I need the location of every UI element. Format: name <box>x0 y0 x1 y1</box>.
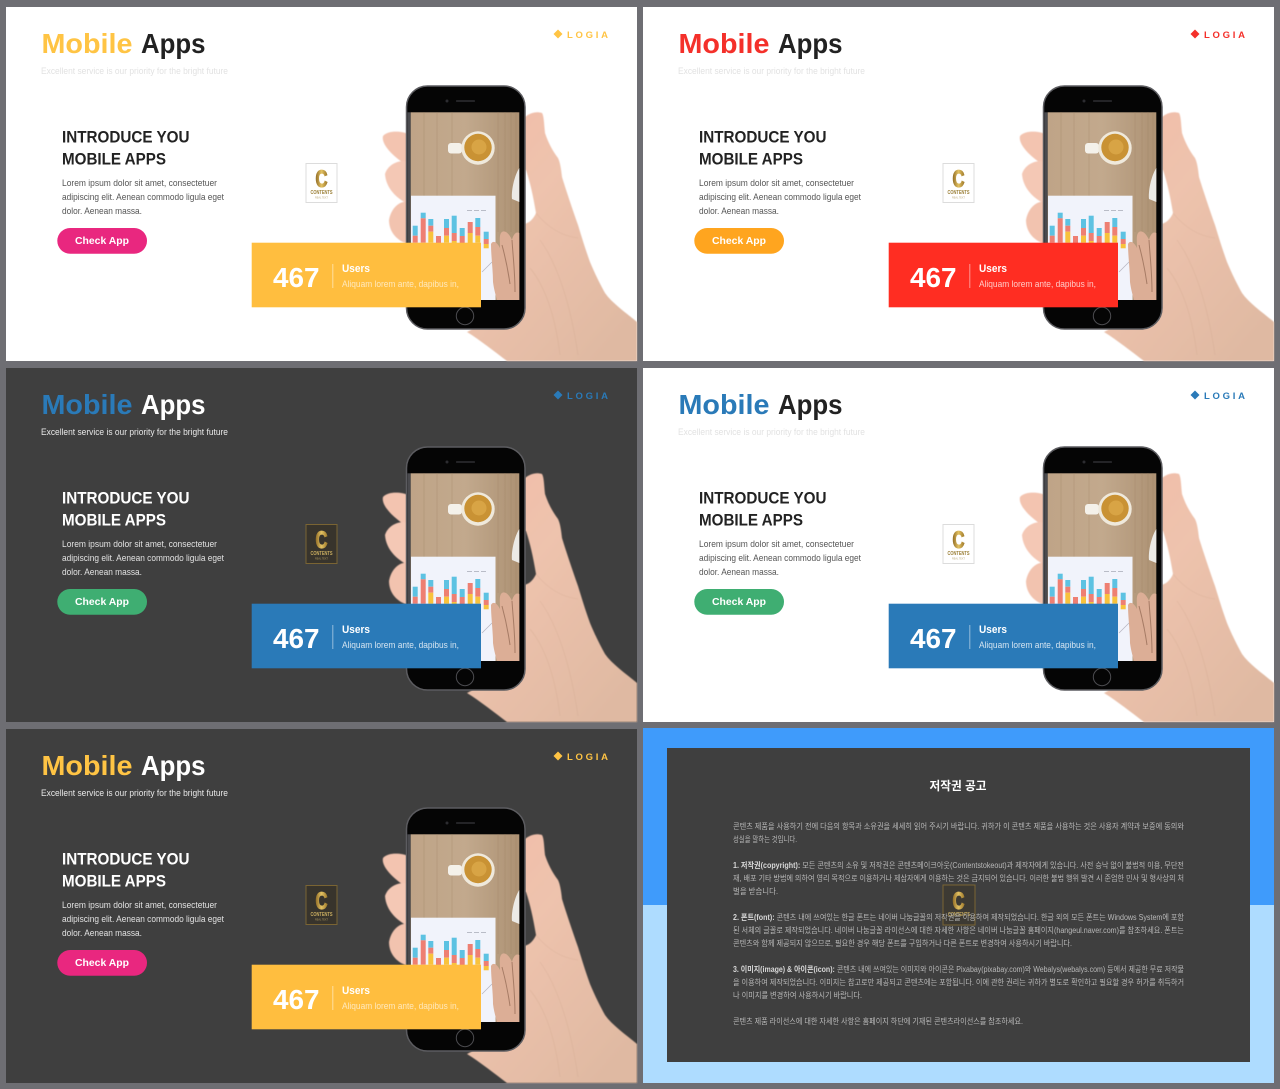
notice intro: 콘텐츠 제품을 사용하기 전에 다음의 항목과 소유권을 세세히 읽어 주시기 바랍니다. 귀하가 이 콘텐츠 제품을 사용하는 것은 사용자 계약과 보증에 동의와 <box>733 821 1185 831</box>
logo: LOGIA: LOGIA <box>567 752 608 763</box>
notice clause 3: image and icon <box>733 964 1184 1000</box>
notice clause 1: copyright <box>733 860 1184 896</box>
watermark logo: C <box>316 888 328 915</box>
stat banner: 467 <box>273 623 320 654</box>
watermark logo: CONTENTS <box>948 190 970 196</box>
title: Apps <box>778 389 842 420</box>
title: Apps <box>778 28 842 59</box>
body text <box>699 539 861 577</box>
title <box>42 750 206 781</box>
panel: red on white <box>643 7 1274 361</box>
watermark logo <box>306 886 337 924</box>
panel: yellow on white <box>6 7 637 361</box>
heading <box>699 488 826 530</box>
heading <box>62 850 190 890</box>
watermark logo: REAL TEXT <box>315 196 328 200</box>
body text: Lorem ipsum dolor sit amet, consectetuer <box>699 539 854 549</box>
notice clause 3: image and icon: 나 이미지를 변경하여 사용하시기 바랍니다. <box>733 990 862 1000</box>
watermark logo <box>943 164 974 202</box>
title: Mobile <box>42 389 132 420</box>
logo: LOGIA: LOGIA <box>567 391 608 402</box>
title: Mobile <box>678 389 770 420</box>
stat banner: 467 <box>273 984 320 1015</box>
body text <box>699 178 861 216</box>
body text <box>62 539 224 577</box>
heading: INTRODUCE YOU <box>699 488 826 508</box>
body text: Lorem ipsum dolor sit amet, consectetuer <box>62 539 217 549</box>
body text: adipiscing elit. Aenean commodo ligula eget <box>699 192 861 202</box>
title: Apps <box>141 28 206 59</box>
notice intro <box>733 821 1185 844</box>
notice clause 2: font: 2. 폰트(font): 콘텐츠 내에 쓰여있는 한글 폰트는 네이버 나눔글꼴의 저작권을 이용하여 제작되었습니다. 한글 외의 모든 폰트는 Windows System에 포함 <box>733 912 1185 922</box>
notice clause 3: image and icon: 3. 이미지(image) & 아이콘(icon): 콘텐츠 내에 쓰여있는 이미지와 아이콘은 Pixabay(pixabay.com)와 Webalys(webalys.com) 등에서 제공한 무료 저작물 <box>733 964 1184 974</box>
stat banner: Aliquam lorem ante, dapibus in, <box>342 1001 459 1011</box>
stat banner: 467 <box>910 262 956 293</box>
watermark logo <box>306 524 337 564</box>
stat banner: Aliquam lorem ante, dapibus in, <box>342 640 459 650</box>
stat banner <box>889 604 1118 668</box>
panel: blue on dark <box>6 368 637 722</box>
title <box>678 389 842 420</box>
button: Check App: Check App <box>75 596 129 608</box>
title: Mobile <box>678 28 770 59</box>
heading: MOBILE APPS <box>62 510 166 530</box>
stat banner: Users <box>342 624 370 636</box>
stat banner <box>252 243 481 307</box>
button: Check App <box>57 950 147 976</box>
notice clause 1: copyright: 1. 저작권(copyright): 모든 콘텐츠의 소유 및 저작권은 콘텐츠메이크아웃(Contentstokeout)과 제작자에게 있습니다. 사전 승낙 없이 불법적 이용, 무단전 <box>733 860 1184 870</box>
body text: Lorem ipsum dolor sit amet, consectetuer <box>699 178 854 188</box>
heading <box>62 128 190 168</box>
heading: INTRODUCE YOU <box>699 128 826 146</box>
title: Mobile <box>42 750 132 781</box>
stat banner <box>252 604 481 668</box>
subtitle: Excellent service is our priority for the bright future <box>678 427 865 437</box>
body text: dolor. Aenean massa. <box>62 928 142 938</box>
watermark logo: C <box>952 527 964 554</box>
stat banner: Users <box>342 263 370 275</box>
heading: INTRODUCE YOU <box>62 128 190 146</box>
watermark logo: REAL TEXT <box>315 918 328 922</box>
title <box>42 28 206 59</box>
subtitle: Excellent service is our priority for the bright future <box>678 66 865 76</box>
body text <box>62 178 224 216</box>
stat banner <box>252 965 481 1029</box>
title: Apps <box>141 750 206 781</box>
notice clause 2: font: 된 서체의 글꼴로 제작되었습니다. 네이버 나눔글꼴 라이선스에 대한 자세한 사항은 네이버 나눔글꼴 홈페이지(hangeul.naver.com)를 참조하세요. 폰트는 <box>733 925 1184 935</box>
subtitle: Excellent service is our priority for the bright future <box>41 427 228 437</box>
notice clause 1: copyright: 재, 배포 기타 방법에 의하여 영리 목적으로 이용하거나 제삼자에게 이용하는 것은 금지되어 있습니다. 이러한 불법 행위 발견 시 준엄한 민사 및 형사상의 처 <box>733 873 1184 883</box>
button: Check App: Check App <box>75 957 129 969</box>
button: Check App: Check App <box>712 235 766 247</box>
phone held in hand <box>1020 447 1274 722</box>
heading: MOBILE APPS <box>699 510 803 530</box>
body text: adipiscing elit. Aenean commodo ligula eget <box>62 914 224 924</box>
body text: dolor. Aenean massa. <box>62 206 142 216</box>
watermark logo: CONTENTS <box>310 551 333 557</box>
stat banner: Users <box>342 985 370 997</box>
button: Check App <box>694 589 784 615</box>
notice watermark logo: CONTENTS <box>948 912 971 918</box>
notice intro: 성실을 말하는 것입니다. <box>733 834 797 844</box>
watermark logo: REAL TEXT <box>952 556 965 560</box>
title <box>42 389 206 420</box>
button: Check App: Check App <box>712 596 766 608</box>
notice clause 3: image and icon: 을 이용하여 제작되었습니다. 이미지는 참고로만 제공되고 콘텐츠에는 포함됩니다. 이에 관한 권리는 귀하가 별도로 확인하고 필요할 경우 허가를 취득하거 <box>733 977 1184 987</box>
title: Mobile <box>42 28 132 59</box>
notice clause 2: font <box>733 912 1185 948</box>
button: Check App: Check App <box>75 235 129 247</box>
stat banner: Users <box>979 624 1007 636</box>
notice clause 2: font: 콘텐츠와 함께 제공되지 않으므로, 필요한 경우 해당 폰트를 구입하거나 다른 폰트로 변경하여 사용하시기 바랍니다. <box>733 938 1072 948</box>
body text: dolor. Aenean massa. <box>699 567 779 577</box>
body text: dolor. Aenean massa. <box>62 567 142 577</box>
heading: MOBILE APPS <box>62 872 166 890</box>
subtitle: Excellent service is our priority for the bright future <box>41 788 228 798</box>
stat banner: Aliquam lorem ante, dapibus in, <box>342 279 459 289</box>
phone held in hand <box>383 447 637 722</box>
watermark logo: C <box>316 527 328 554</box>
body text: Lorem ipsum dolor sit amet, consectetuer <box>62 178 217 188</box>
button: Check App <box>57 228 147 254</box>
watermark logo: REAL TEXT <box>952 196 965 200</box>
body text: adipiscing elit. Aenean commodo ligula eget <box>62 553 224 563</box>
title: Apps <box>141 389 206 420</box>
notice clause 1: copyright: 벌을 받습니다. <box>733 886 778 896</box>
button: Check App <box>57 589 147 615</box>
watermark logo: REAL TEXT <box>315 556 328 560</box>
logo: LOGIA: LOGIA <box>1204 391 1245 402</box>
panel: yellow on dark <box>6 729 637 1083</box>
body text: adipiscing elit. Aenean commodo ligula eget <box>62 192 224 202</box>
stat banner: 467 <box>910 623 956 654</box>
body text <box>62 900 224 938</box>
watermark logo: C <box>316 166 328 193</box>
heading <box>699 128 826 168</box>
notice title: 저작권 공고 <box>930 778 986 793</box>
heading: INTRODUCE YOU <box>62 488 190 508</box>
button: Check App <box>694 228 784 254</box>
phone held in hand <box>1020 86 1274 361</box>
phone held in hand <box>383 808 637 1083</box>
heading: MOBILE APPS <box>699 150 803 168</box>
stat banner: Aliquam lorem ante, dapibus in, <box>979 640 1096 650</box>
watermark logo: CONTENTS <box>948 551 970 557</box>
heading <box>62 488 190 530</box>
panel: copyright notice <box>643 728 1274 1083</box>
stat banner <box>889 243 1118 307</box>
logo: LOGIA: LOGIA <box>567 30 608 41</box>
watermark logo <box>306 164 337 202</box>
phone held in hand <box>383 86 637 361</box>
notice watermark logo <box>943 885 975 925</box>
body text: adipiscing elit. Aenean commodo ligula eget <box>699 553 861 563</box>
watermark logo: CONTENTS <box>310 912 333 918</box>
notice watermark logo: C <box>952 888 964 915</box>
body text: dolor. Aenean massa. <box>699 206 779 216</box>
heading: INTRODUCE YOU <box>62 850 190 868</box>
panel: blue on white <box>643 368 1274 722</box>
watermark logo: C <box>952 166 964 193</box>
title <box>678 28 842 59</box>
subtitle: Excellent service is our priority for the bright future <box>41 66 228 76</box>
stat banner: Aliquam lorem ante, dapibus in, <box>979 279 1096 289</box>
watermark logo: CONTENTS <box>310 190 333 196</box>
heading: MOBILE APPS <box>62 150 166 168</box>
stat banner: 467 <box>273 262 320 293</box>
logo: LOGIA: LOGIA <box>1204 30 1245 41</box>
notice footer line: 콘텐츠 제품 라이선스에 대한 자세한 사항은 홈페이지 하단에 기재된 콘텐츠라이선스를 참조하세요. <box>733 1016 1023 1026</box>
watermark logo <box>943 524 974 564</box>
stat banner: Users <box>979 263 1007 275</box>
body text: Lorem ipsum dolor sit amet, consectetuer <box>62 900 217 910</box>
